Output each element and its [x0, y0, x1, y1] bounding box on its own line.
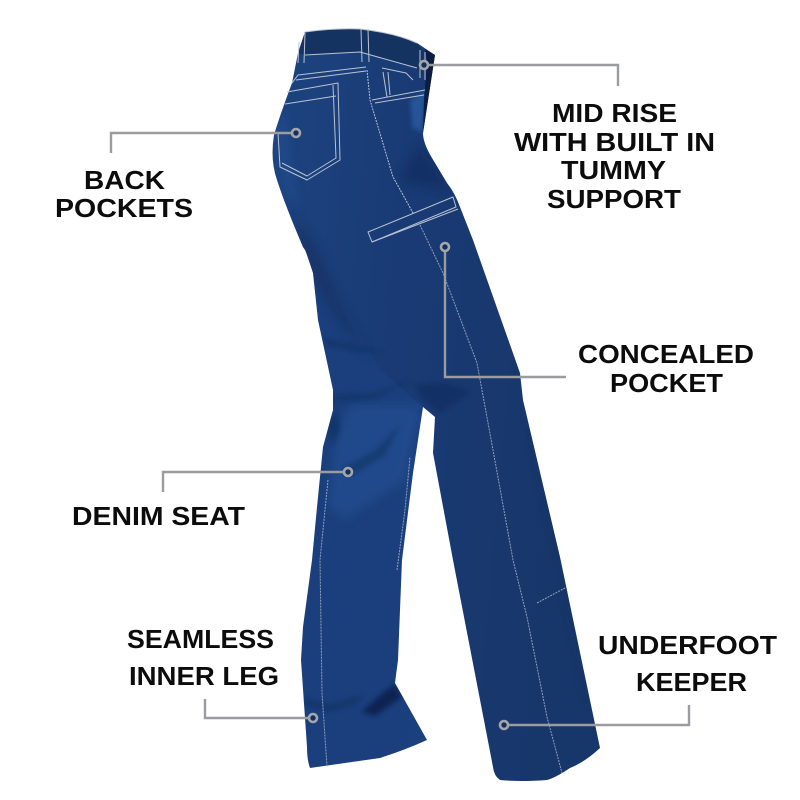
- back leg: [301, 240, 440, 768]
- stitching: cargo pocket: [368, 197, 456, 242]
- callout: mid rise: WITH BUILT IN: [514, 129, 715, 157]
- callout: mid rise: TUMMY: [561, 157, 666, 185]
- callout: back pockets: [55, 129, 300, 223]
- stitching: back pocket: [278, 83, 340, 180]
- callout: underfoot keeper: [500, 632, 777, 729]
- stitching: side seam: [367, 70, 413, 213]
- callout: underfoot keeper: KEEPER: [636, 669, 747, 697]
- callout: denim seat: DENIM SEAT: [72, 503, 245, 531]
- callout: seamless inner leg: SEAMLESS: [127, 626, 274, 654]
- callout: concealed pocket: [441, 243, 754, 398]
- callout: concealed pocket: POCKET: [610, 370, 723, 398]
- stitching: leg seam: [420, 225, 562, 773]
- callout: concealed pocket: CONCEALED: [578, 341, 754, 369]
- callout: denim seat: [72, 468, 352, 531]
- jeans illustration: [273, 29, 600, 781]
- callout: seamless inner leg: INNER LEG: [129, 663, 279, 691]
- shading and folds: [280, 91, 465, 717]
- callout: mid rise: MID RISE: [552, 100, 677, 128]
- stitching: waistband and yoke: [305, 29, 417, 43]
- callout: back pockets: POCKETS: [55, 195, 193, 223]
- callout: seamless inner leg: [127, 626, 317, 722]
- callout: back pockets: BACK: [84, 167, 166, 195]
- callout: mid rise: SUPPORT: [547, 186, 681, 214]
- callout: mid rise: [420, 61, 715, 214]
- front leg and hip: [273, 29, 600, 781]
- waistband: [298, 29, 424, 75]
- callout: underfoot keeper: UNDERFOOT: [598, 632, 777, 660]
- stitching: front pocket: [372, 68, 425, 103]
- fly: [423, 49, 435, 133]
